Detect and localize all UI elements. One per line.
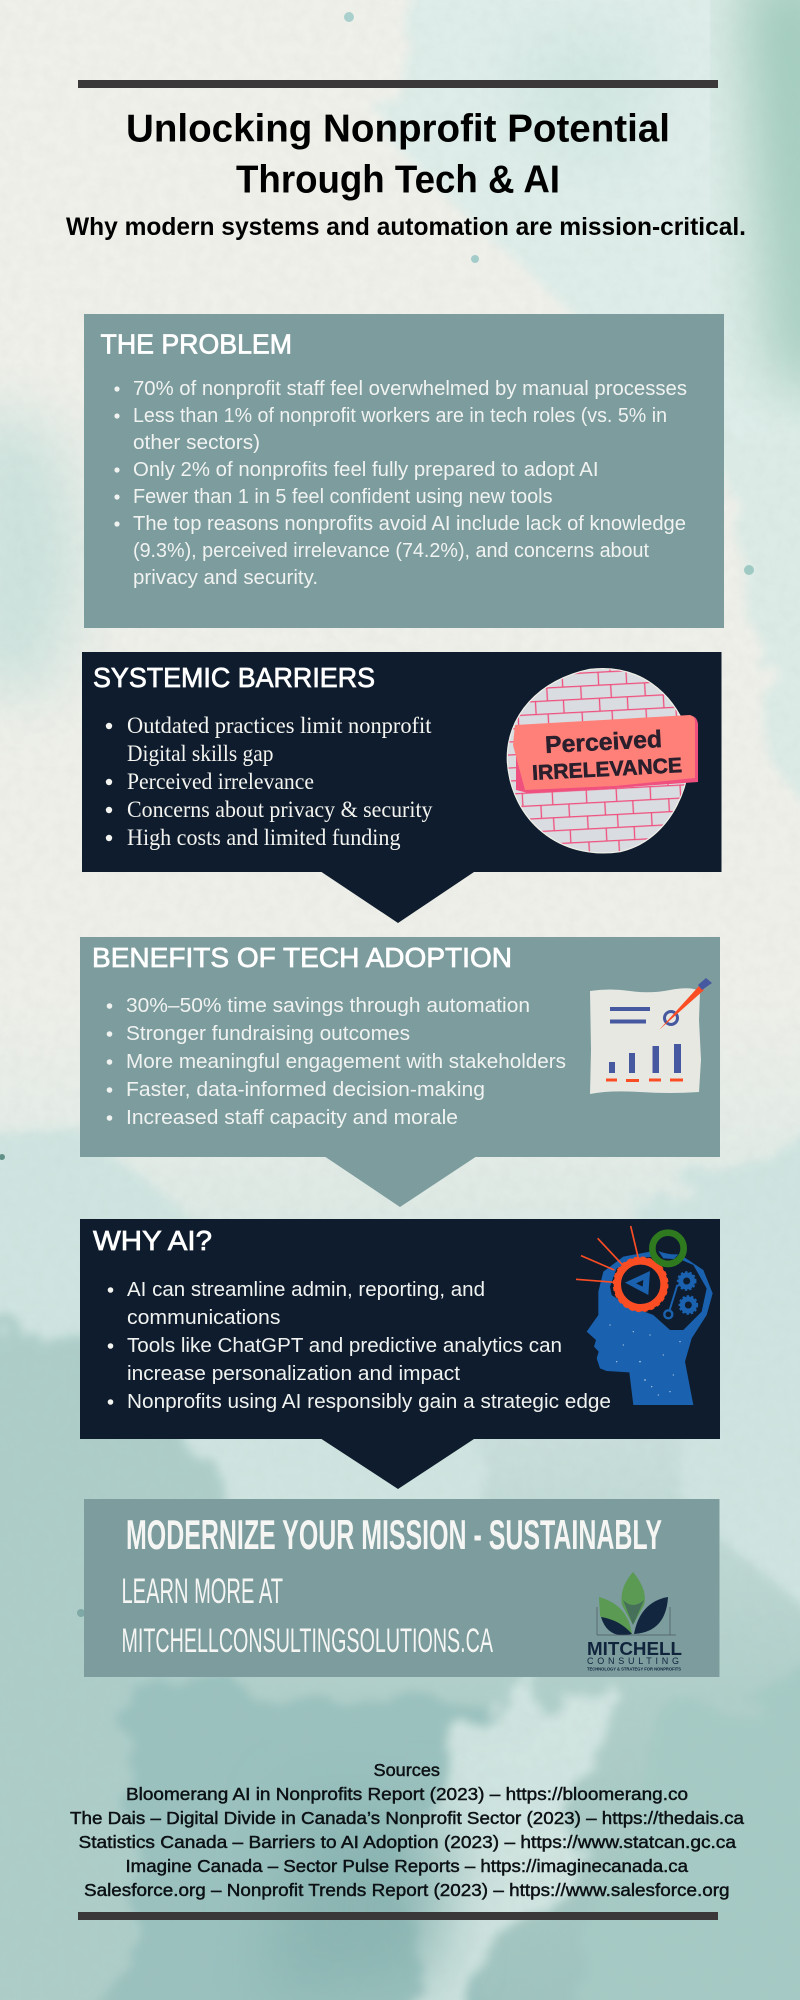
- bullet list: problem statistics: The top reasons nonprofits avoid AI include lack of knowledge: [133, 513, 686, 535]
- heading: systemic barriers: SYSTEMIC BARRIERS: [93, 662, 375, 693]
- bullet list: barriers: Outdated practices limit nonprofit: [127, 713, 432, 738]
- bullet list: problem statistics: (9.3%), perceived irrelevance (74.2%), and concerns about: [133, 540, 649, 562]
- bullet list: barriers: Perceived irrelevance: [127, 769, 314, 794]
- top divider rule: [78, 80, 718, 88]
- bullet list: problem statistics: Less than 1% of nonprofit workers are in tech roles (vs. 5% in: [133, 405, 667, 427]
- bullet list: why AI: [108, 1279, 611, 1413]
- bullet list: problem statistics: privacy and security.: [133, 567, 318, 589]
- title: Unlocking Nonprofit Potential: [126, 108, 670, 150]
- panel: benefits of tech adoption: [80, 937, 720, 1207]
- bullet list: barriers: High costs and limited funding: [127, 825, 401, 850]
- heading: benefits: BENEFITS OF TECH ADOPTION: [92, 942, 512, 973]
- bullet list: why AI: communications: [127, 1307, 280, 1329]
- panel: why AI: [80, 1219, 720, 1489]
- bullet list: benefits: Increased staff capacity and morale: [126, 1107, 458, 1129]
- bullet list: benefits: Faster, data-informed decision-making: [126, 1079, 485, 1101]
- bullet list: benefits: 30%–50% time savings through automation: [126, 995, 530, 1017]
- heading: the problem: THE PROBLEM: [100, 328, 292, 360]
- panel: the problem: [84, 314, 724, 628]
- bullet list: problem statistics: 70% of nonprofit staff feel overwhelmed by manual processes: [133, 378, 687, 400]
- logo: Mitchell Consulting: TECHNOLOGY & STRATEGY FOR NONPROFITS: [587, 1666, 681, 1672]
- bullet list: benefits: More meaningful engagement with stakeholders: [126, 1051, 566, 1073]
- bullet list: why AI: increase personalization and impact: [127, 1363, 460, 1385]
- bullet list: benefits: [107, 995, 566, 1129]
- sources: Statistics Canada – Barriers to AI Adoption (2023) – https://www.statcan.gc.ca: [78, 1832, 736, 1852]
- logo: Mitchell Consulting: [587, 1572, 682, 1672]
- logo: Mitchell Consulting: MITCHELL: [587, 1639, 682, 1659]
- bullet list: barriers: Concerns about privacy & security: [127, 797, 433, 822]
- bullet list: benefits: Stronger fundraising outcomes: [126, 1023, 410, 1045]
- icon: head with gears: [576, 1226, 713, 1405]
- bullet list: why AI: Tools like ChatGPT and predictive analytics can: [127, 1335, 562, 1357]
- logo: Mitchell Consulting: CONSULTING: [587, 1656, 679, 1666]
- heading: why AI: WHY AI?: [93, 1225, 212, 1256]
- bullet list: problem statistics: Fewer than 1 in 5 feel confident using new tools: [133, 486, 552, 508]
- CTA learn more: LEARN MORE AT: [122, 1572, 283, 1611]
- bullet list: problem statistics: other sectors): [133, 432, 260, 454]
- icon: chart on paper with pencil: [590, 978, 712, 1094]
- subtitle: Why modern systems and automation are mission-critical.: [66, 213, 746, 241]
- bullet list: problem statistics: Only 2% of nonprofits feel fully prepared to adopt AI: [133, 459, 598, 481]
- title: [126, 108, 670, 202]
- bullet list: why AI: AI can streamline admin, reporting, and: [127, 1279, 485, 1301]
- title: Through Tech & AI: [236, 158, 560, 202]
- sources: Imagine Canada – Sector Pulse Reports – https://imaginecanada.ca: [126, 1856, 688, 1876]
- icon: brick wall badge: IRRELEVANCE: [532, 754, 683, 785]
- bullet list: barriers: Digital skills gap: [127, 741, 274, 766]
- bullet list: why AI: Nonprofits using AI responsibly gain a strategic edge: [127, 1391, 611, 1413]
- icon: brick wall badge: Perceived: [544, 726, 663, 759]
- CTA website: MITCHELLCONSULTINGSOLUTIONS.CA: [122, 1622, 493, 1660]
- panel: call to action: [84, 1499, 720, 1677]
- sources: Bloomerang AI in Nonprofits Report (2023) – https://bloomerang.co: [126, 1784, 688, 1804]
- sources: Sources: [374, 1760, 440, 1780]
- bullet list: problem statistics: [114, 378, 687, 589]
- panel: systemic barriers: [82, 652, 722, 923]
- sources: [70, 1760, 744, 1900]
- bottom divider rule: [78, 1912, 718, 1920]
- bullet list: barriers: [106, 713, 433, 850]
- icon: brick wall badge: [506, 668, 698, 854]
- sources: Salesforce.org – Nonprofit Trends Report (2023) – https://www.salesforce.org: [84, 1880, 730, 1900]
- sources: The Dais – Digital Divide in Canada’s Nonprofit Sector (2023) – https://thedais.ca: [70, 1808, 744, 1828]
